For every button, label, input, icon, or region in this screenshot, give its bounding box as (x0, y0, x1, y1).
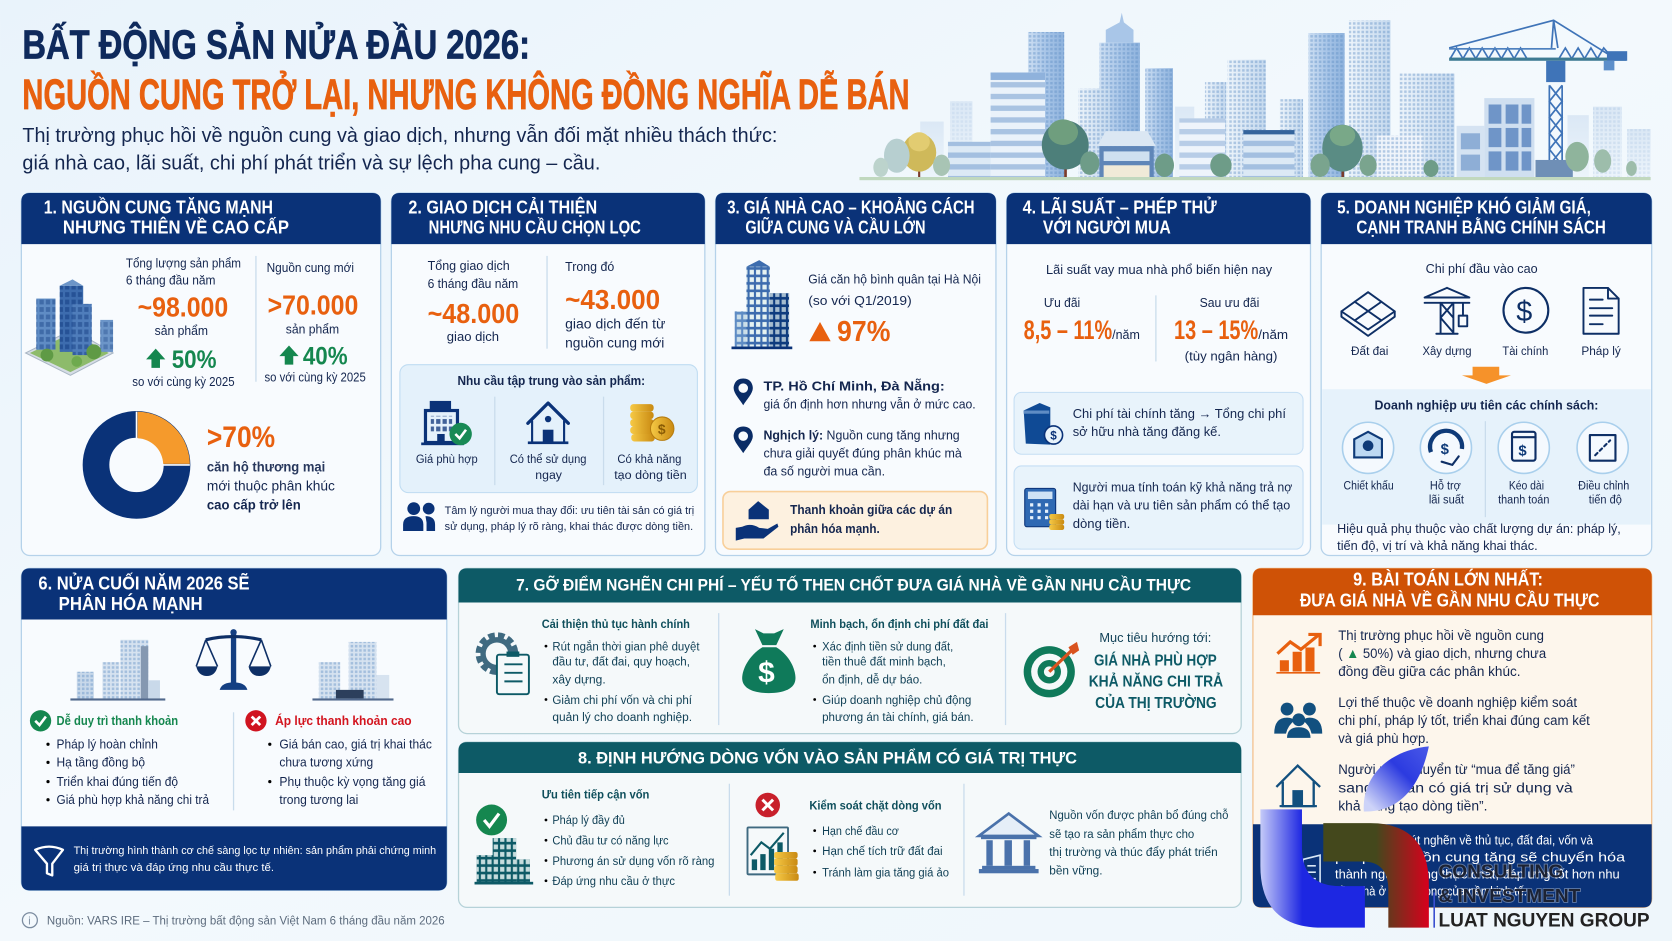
panel 7 heading (459, 568, 1241, 602)
source note: Nguồn: VARS IRE – Thị trường bất động sản Việt Nam 6 tháng đầu năm 2026 (47, 914, 445, 927)
input cost labels (1351, 345, 1621, 358)
good liquidity column: Giá phù hợp khả năng chi trả (57, 792, 210, 807)
finance cost box (1014, 392, 1303, 454)
stat: new supply transactions: giao dịch đến từ (565, 315, 665, 331)
panel 3 heading: GIỮA CUNG VÀ CẦU LỚN (745, 217, 926, 238)
title (22, 22, 910, 119)
panel 4 heading: VỚI NGƯỜI MUA (1043, 217, 1171, 238)
stat: 97 percent: Giá căn hộ bình quân tại Hà Nội (808, 272, 981, 287)
icon: crane (1425, 288, 1469, 334)
conclusion text (1335, 833, 1626, 899)
icon: building outline (1303, 855, 1320, 885)
icon: land (1341, 292, 1395, 336)
icon: house (1276, 766, 1320, 807)
stat: 70 percent: cao cấp trở lên (207, 497, 301, 513)
icon: money bag (742, 629, 795, 693)
stat: 70 percent: mới thuộc phân khúc (207, 477, 335, 493)
stat: 70 percent (207, 421, 335, 513)
subtitle: giá nhà cao, lãi suất, chi phí phát triển và sự lệch pha cung – cầu. (22, 153, 600, 175)
logo wordmark: & INVESTMENT (1438, 886, 1580, 906)
panel 2 heading: 2. GIAO DỊCH CẢI THIỆN (408, 196, 597, 217)
stat: preferential rate: 8,5 – 11% (1024, 315, 1112, 345)
panel 9 heading: ĐƯA GIÁ NHÀ VỀ GẦN NHU CẦU THỰC (1300, 590, 1599, 611)
icon: stop and chart (747, 793, 799, 881)
HCMC and Da Nang note: giá ổn định hơn nhưng vẫn ở mức cao. (763, 396, 976, 411)
icon: scales (196, 629, 271, 690)
stat: new supply (264, 260, 366, 385)
stat: total products: sản phẩm (155, 323, 208, 338)
capital allocation text: bền vững. (1049, 864, 1103, 877)
priority capital column: Phương án sử dụng vốn rõ ràng (552, 855, 714, 868)
high pressure column: trong tương lai (279, 792, 358, 807)
panel 1 heading (21, 193, 381, 244)
input cost labels: Pháp lý (1581, 345, 1621, 358)
panel 3 heading (716, 193, 996, 244)
icon: dollar circle (1503, 288, 1548, 333)
paradox note: đa số người mua cần. (763, 464, 885, 479)
logo wordmark (1438, 862, 1650, 932)
icon: gold coins (630, 404, 674, 441)
stat: new supply transactions: Trong đó (565, 259, 614, 274)
filter text (74, 845, 436, 874)
icon: interest support (1420, 422, 1472, 473)
icon: extended payment: $ (1518, 442, 1527, 459)
icon: gold coins: $ (658, 421, 666, 437)
panel 5: developers (1321, 193, 1652, 556)
icon: interest support: $ (1441, 441, 1450, 458)
city skyline illustration (859, 13, 1651, 180)
icon: building and dollar: $ (1050, 429, 1057, 442)
input cost labels: Xây dựng (1422, 345, 1472, 358)
buyer calculation box: Người mua tính toán kỹ khả năng trả nợ (1073, 480, 1292, 495)
buyer calculation box: dài hạn và ưu tiên sản phẩm có thể tạo (1073, 498, 1290, 513)
paradox note: Nghịch lý: Nguồn cung tăng nhưng (763, 427, 960, 442)
policy labels: tiến độ (1589, 493, 1622, 506)
panel 5 heading (1321, 193, 1652, 244)
policy labels: lãi suất (1429, 493, 1465, 506)
capital control column (809, 799, 949, 879)
icon: buyers (403, 502, 435, 531)
panel 1 heading: NHƯNG THIÊN VỀ CAO CẤP (63, 217, 289, 238)
filter text: giá trị thực và đáp ứng nhu cầu thực tế. (74, 862, 274, 874)
stat: after preferential rate: /năm (1258, 327, 1288, 342)
recovery text: Thị trường phục hồi về nguồn cung (1338, 627, 1544, 643)
panel 3 heading: 3. GIÁ NHÀ CAO – KHOẢNG CÁCH (727, 196, 975, 217)
stat: after preferential rate: (tùy ngân hàng) (1185, 348, 1277, 363)
admin procedures column (542, 618, 700, 724)
panel 6 heading: PHÂN HÓA MẠNH (59, 593, 203, 614)
land cost column: Xác định tiền sử dung đất, (822, 640, 953, 653)
buyer psychology note (445, 505, 694, 533)
high pressure column: Áp lực thanh khoản cao (275, 713, 412, 728)
icon: city left (70, 640, 165, 701)
admin procedures column: quản lý cho doanh nghiệp. (552, 711, 692, 724)
subtitle (22, 124, 777, 175)
finance cost box: Chi phí tài chính tăng → Tổng chi phí (1073, 406, 1286, 421)
stat: total products: 6 tháng đầu năm (126, 273, 215, 288)
priority capital column: Pháp lý đầy đủ (552, 814, 625, 827)
icon: house (528, 403, 568, 444)
icon: location pin (734, 379, 753, 405)
priority capital column: Ưu tiên tiếp cận vốn (542, 789, 649, 802)
capital control column: Hạn chế tích trữ đất đai (822, 845, 943, 858)
stat: new supply: Nguồn cung mới (267, 260, 354, 275)
panel 2 heading (391, 193, 705, 244)
stat: 97 percent: 97% (837, 316, 890, 348)
panel 9 heading (1253, 568, 1652, 615)
priority capital column (542, 789, 714, 888)
land cost column: Minh bạch, ổn định chi phí đất đai (810, 618, 988, 631)
capital allocation text: thị trường và thúc đẩy phát triển (1049, 846, 1218, 859)
target text (1089, 630, 1223, 712)
input cost labels: Tài chính (1502, 345, 1548, 358)
advantage text: và giá phù hợp. (1338, 730, 1429, 746)
stat: new supply transactions: ~43.000 (565, 284, 660, 315)
panel 2 heading: NHƯNG NHU CẦU CHỌN LỌC (429, 217, 641, 238)
paradox note: chưa giải quyết đúng phân khúc mà (763, 445, 963, 460)
panel 6 heading: 6. NỬA CUỐI NĂM 2026 SẼ (38, 573, 250, 594)
capital control column: Tránh làm gia tăng giá ảo (822, 866, 949, 879)
panel 4: interest rates (1007, 193, 1310, 556)
panel 6: second half outlook (21, 568, 447, 890)
buyer psychology note: Tâm lý người mua thay đổi: ưu tiên tài sản có giá trị (445, 505, 694, 517)
panel 2: transactions (391, 193, 705, 556)
icon: tall building (732, 260, 792, 349)
panel 1: supply (21, 193, 381, 556)
stat: new supply transactions: nguồn cung mới (565, 335, 664, 351)
logo wordmark: LUAT NGUYEN GROUP (1438, 911, 1650, 932)
policy labels: Kéo dài (1509, 479, 1544, 492)
icon: target (1024, 642, 1079, 697)
panel 4 heading: 4. LÃI SUẤT – PHÉP THỬ (1023, 196, 1218, 217)
high pressure column: Phụ thuộc kỳ vọng tăng giá (279, 774, 426, 789)
stat: 70 percent: căn hộ thương mại (207, 458, 325, 474)
demand labels: Có thể sử dụng (510, 453, 586, 466)
HCMC and Da Nang note (763, 378, 976, 411)
paradox note (763, 427, 963, 479)
high pressure column (245, 710, 432, 807)
title: BẤT ĐỘNG SẢN NỬA ĐẦU 2026: (22, 22, 530, 68)
icon: discount (1342, 422, 1394, 473)
policy section (1322, 389, 1651, 525)
stat: total transactions: 6 tháng đầu năm (428, 276, 518, 291)
land cost column (810, 618, 988, 724)
admin procedures column: đầu tư, đất đai, quy hoạch, (552, 655, 690, 668)
priority capital column: Đáp ứng nhu cầu ở thực (552, 875, 675, 888)
admin procedures column: Rút ngắn thời gian phê duyệt (552, 640, 700, 653)
panel 3: house prices (716, 193, 996, 556)
icon: hand with house (736, 501, 778, 541)
good liquidity column: Hạ tầng đồng bộ (57, 755, 145, 770)
panel 7 heading: 7. GỠ ĐIỂM NGHẼN CHI PHÍ – YẾU TỐ THEN CHỐT ĐƯA GIÁ NHÀ VỀ GẦN NHU CẦU THỰC (516, 575, 1191, 595)
effectiveness note (1337, 521, 1621, 553)
arrow down (1462, 367, 1511, 384)
icon: legal document (1583, 288, 1619, 334)
logo L mark (1260, 809, 1365, 928)
panel 5 heading: 5. DOANH NGHIỆP KHÓ GIẢM GIÁ, (1337, 196, 1591, 217)
admin procedures column: xây dựng. (552, 673, 606, 686)
liquidity callout (723, 492, 987, 549)
icon: apartment towers (26, 279, 113, 375)
recovery text: đồng đều giữa các phân khúc. (1338, 663, 1521, 679)
conclusion text: pháp lý, nguồn cung tăng sẽ chuyển hóa (1335, 850, 1626, 865)
buyer calculation box: dòng tiền. (1073, 516, 1130, 531)
high pressure column: chưa tương xứng (279, 755, 373, 770)
good liquidity column: Triển khai đúng tiến độ (57, 774, 178, 789)
policy labels (1344, 479, 1629, 506)
land cost column: phương án tài chính, giá bán. (822, 711, 974, 724)
conclusion text: cầu nhà ở và kỳ vọng của nền kinh tế. (1335, 884, 1527, 899)
stat: 97 percent: (so với Q1/2019) (808, 293, 912, 308)
title: NGUỒN CUNG TRỞ LẠI, NHƯNG KHÔNG ĐỒNG NGHĨA DỄ BÁN (22, 70, 910, 119)
advantage text: Lợi thế thuộc về doanh nghiệp kiểm soát (1338, 694, 1577, 710)
icon: extended payment (1498, 422, 1549, 473)
buyer shift text: Người mua chuyển từ “mua để tăng giá” (1338, 761, 1575, 777)
demand labels: ngay (535, 469, 562, 482)
stat: total products: 50% (172, 347, 217, 374)
high pressure column: Giá bán cao, giá trị khai thác (279, 737, 432, 752)
stat: after preferential rate: 13 – 15% (1174, 315, 1258, 345)
icon: city right (312, 642, 393, 701)
policy section: Doanh nghiệp ưu tiên các chính sách: (1374, 397, 1598, 412)
rates subtitle: Lãi suất vay mua nhà phổ biến hiện nay (1046, 262, 1273, 277)
capital control column: Hạn chế đầu cơ (822, 825, 899, 838)
panel 8: capital flows (459, 742, 1241, 907)
priority capital column: Chủ đầu tư có năng lực (552, 835, 669, 848)
good liquidity column (30, 710, 210, 807)
input cost labels: Đất đai (1351, 345, 1388, 358)
icon: location pin (734, 427, 753, 453)
policy labels: Chiết khấu (1344, 479, 1394, 492)
icon: bank (979, 814, 1039, 873)
stat: preferential rate: Ưu đãi (1044, 295, 1080, 310)
watermark logo (1260, 746, 1650, 932)
panel 7: cost bottleneck (459, 568, 1241, 734)
panel 9: biggest problem (1253, 568, 1652, 907)
policy labels: Điều chỉnh (1578, 479, 1629, 492)
subtitle: Thị trường phục hồi về nguồn cung và giao dịch, nhưng vẫn đối mặt nhiều thách thức: (22, 124, 777, 147)
stat: preferential rate (1024, 295, 1140, 345)
stat: total transactions: ~48.000 (428, 298, 519, 329)
demand box (400, 365, 697, 493)
stat: total products: ~98.000 (138, 292, 228, 323)
icon: money bag: $ (758, 656, 775, 689)
icon: building and dollar (1024, 403, 1063, 445)
recovery text: ( ▲ 50%) và giao dịch, nhưng chưa (1338, 645, 1546, 661)
stat: new supply: 40% (303, 344, 348, 371)
logo n mark (1323, 823, 1429, 928)
stat: 70 percent: >70% (207, 421, 275, 454)
demand labels (416, 453, 687, 482)
input costs subtitle: Chi phí đầu vào cao (1426, 261, 1538, 276)
buyer shift text (1338, 761, 1575, 813)
panel 4 heading (1007, 193, 1310, 244)
stat: total transactions (428, 258, 519, 344)
logo leaf (1364, 746, 1429, 811)
stat: new supply: >70.000 (268, 290, 358, 321)
effectiveness note: tiến độ, vị trí và khả năng khai thác. (1337, 538, 1538, 553)
capital allocation text (1049, 809, 1229, 877)
stat: total transactions: Tổng giao dịch (428, 258, 510, 273)
demand labels: tạo dòng tiền (614, 469, 687, 482)
target text: GIÁ NHÀ PHÙ HỢP (1094, 650, 1217, 669)
stat: after preferential rate: Sau ưu đãi (1200, 295, 1259, 310)
panel 6 heading (21, 568, 447, 620)
panel 8 heading (459, 742, 1241, 773)
icon: schedule adjust (1577, 422, 1628, 473)
panel 9 heading: 9. BÀI TOÁN LỚN NHẤT: (1353, 568, 1543, 589)
liquidity callout: phân hóa mạnh. (790, 521, 880, 536)
filter footer (21, 826, 447, 890)
land cost column: tiền thuê đất minh bạch, (822, 655, 946, 668)
stat: preferential rate: /năm (1112, 327, 1140, 342)
demand box: Nhu cầu tập trung vào sản phẩm: (457, 373, 645, 388)
good liquidity column: Dễ duy trì thanh khoản (57, 713, 178, 728)
buyer psychology note: sử dụng, pháp lý rõ ràng, khai thác được dòng tiền. (445, 521, 693, 533)
stat: 97 percent (808, 272, 981, 348)
icon: dollar circle: $ (1516, 296, 1532, 328)
panel 5 heading: CẠNH TRANH BẰNG CHÍNH SÁCH (1356, 217, 1606, 238)
buyer calculation box (1014, 466, 1303, 549)
icon: people (1274, 703, 1322, 738)
advantage text: chi phí, pháp lý tốt, triển khai đúng cam kết (1338, 712, 1590, 728)
icon: funnel (35, 847, 63, 875)
target text: CỦA THỊ TRƯỜNG (1095, 693, 1217, 712)
stat: total products (126, 256, 241, 389)
capital control column: Kiểm soát chặt dòng vốn (809, 799, 942, 812)
recovery text (1338, 627, 1546, 679)
icon: growth chart (1276, 634, 1320, 673)
target text: KHẢ NĂNG CHI TRẢ (1089, 672, 1223, 691)
stat: total products: Tổng lượng sản phẩm (126, 256, 241, 271)
policy labels: Hỗ trợ (1430, 479, 1461, 492)
filter text: Thị trường hình thành cơ chế sàng lọc tự nhiên: sản phẩm phải chứng minh (74, 845, 436, 857)
stat: total transactions: giao dịch (447, 329, 499, 344)
donut chart 70% (96, 412, 190, 505)
HCMC and Da Nang note: TP. Hồ Chí Minh, Đà Nẵng: (763, 378, 945, 393)
land cost column: Giúp doanh nghiệp chủ động (822, 694, 971, 707)
demand labels: Có khả năng (617, 453, 681, 466)
effectiveness note: Hiệu quả phụ thuộc vào chất lượng dự án: pháp lý, (1337, 521, 1621, 536)
finance cost box: sở hữu nhà tăng đăng kế. (1073, 424, 1221, 439)
stat: after preferential rate (1174, 295, 1288, 363)
icon: building with check (421, 401, 472, 445)
source note: i (28, 915, 31, 927)
panel 8 heading: 8. ĐỊNH HƯỚNG DÒNG VỐN VÀO SẢN PHẨM CÓ GIÁ TRỊ THỰC (578, 747, 1077, 767)
buyer shift text: sang tài sản có giá trị sử dụng và (1338, 779, 1573, 795)
icon: gear and checklist (479, 636, 529, 694)
stat: new supply: sản phẩm (286, 322, 339, 337)
conclusion text: thành nguồn cung thực chất, đáp ứng tốt hơn nhu (1335, 867, 1620, 882)
land cost column: ổn định, dễ dự báo. (822, 673, 922, 686)
policy labels: thanh toán (1498, 493, 1549, 506)
admin procedures column: Cải thiện thủ tục hành chính (542, 618, 690, 631)
logo wordmark: CONSULTING (1438, 862, 1563, 882)
conclusion footer (1253, 824, 1652, 907)
stat: new supply transactions (565, 259, 665, 351)
stat: new supply: so với cùng kỳ 2025 (264, 370, 366, 385)
buyer shift text: khả năng tạo dòng tiền”. (1338, 797, 1488, 813)
capital allocation text: sẽ tạo ra sản phẩm thực cho (1049, 828, 1195, 841)
liquidity callout: Thanh khoản giữa các dự án (790, 502, 952, 517)
conclusion text: Khi gỡ được nút nghẽn về thủ tục, đất đai, vốn và (1335, 833, 1594, 848)
admin procedures column: Giảm chi phí vốn và chi phí (552, 694, 693, 707)
panel 1 heading: 1. NGUỒN CUNG TĂNG MẠNH (44, 196, 273, 217)
demand labels: Giá phù hợp (416, 453, 478, 466)
capital allocation text: Nguồn vốn được phân bổ đúng chỗ (1049, 809, 1229, 822)
icon: calculator (1025, 488, 1064, 530)
advantage text (1338, 694, 1590, 746)
icon: check and building (475, 805, 533, 884)
target text: Mục tiêu hướng tới: (1099, 630, 1211, 645)
stat: total products: so với cùng kỳ 2025 (132, 374, 235, 389)
good liquidity column: Pháp lý hoàn chỉnh (57, 737, 158, 752)
